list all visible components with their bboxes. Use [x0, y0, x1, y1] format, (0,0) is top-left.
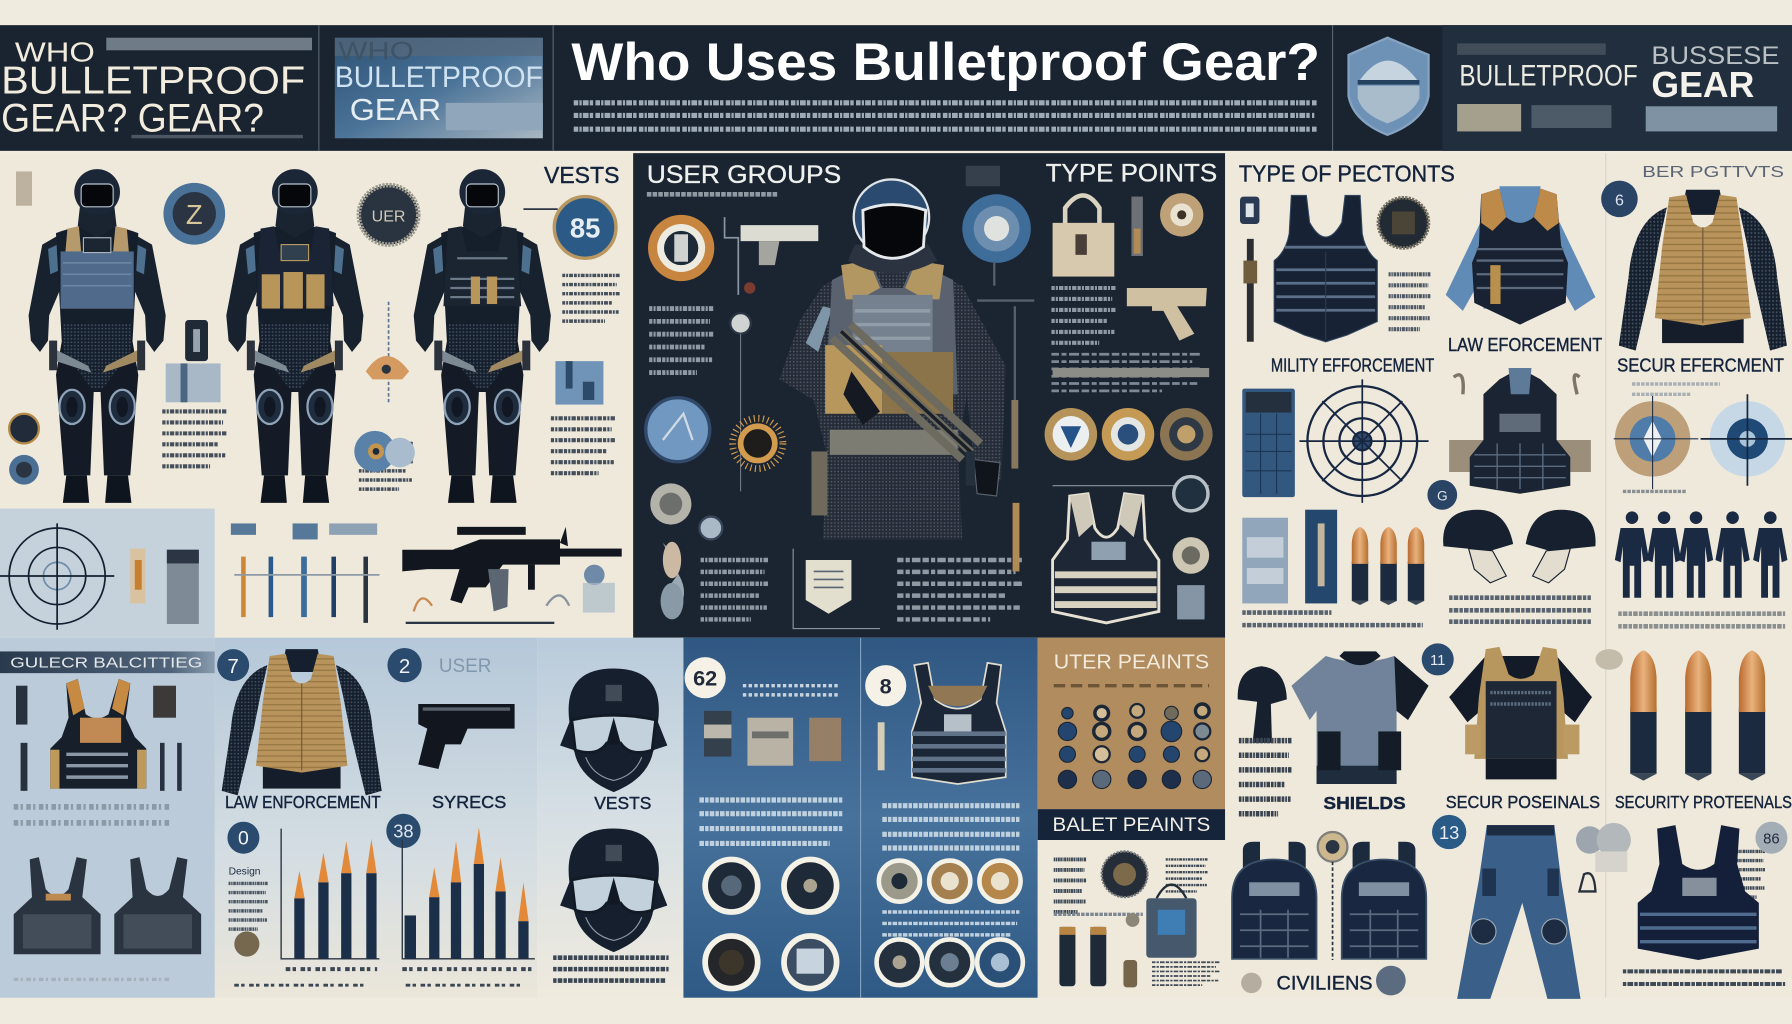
- heading: law eforcement: LAW EFORCEMENT: [1448, 334, 1602, 355]
- caption: [1623, 971, 1785, 984]
- icon: tote bag: [1146, 885, 1197, 958]
- icon: grey t-shirt: [1291, 651, 1429, 784]
- header left title block: GEAR? GEAR?: [1, 96, 264, 140]
- header second banner: WHO: [338, 37, 414, 65]
- badge 7: [217, 649, 249, 681]
- icon: pistol: [418, 704, 515, 769]
- label: law enforcement: LAW ENFORCEMENT: [225, 792, 381, 812]
- small icons: soldiers panel: [9, 171, 603, 485]
- badge 38: [386, 814, 421, 848]
- small discs by label: [1241, 966, 1406, 995]
- greeked captions: [1242, 598, 1785, 626]
- header second banner: [335, 37, 543, 138]
- badge: [1601, 181, 1638, 217]
- icon: target: [0, 523, 114, 630]
- photo strip: [704, 686, 841, 766]
- caption block: [553, 958, 669, 981]
- icon: grey vests: [14, 857, 201, 954]
- badge 62: [685, 657, 726, 698]
- greeked text: [14, 807, 171, 979]
- greeked text: [882, 806, 1019, 935]
- main title: Who Uses Bulletproof Gear?: [571, 33, 1320, 92]
- text blocks: user groups: [647, 194, 1202, 619]
- label: syrecs: SYRECS: [432, 792, 506, 812]
- heading strip: GULECR BALCITTIEG: [10, 655, 202, 671]
- icon: tan long sleeve vest: [1619, 190, 1787, 351]
- badge 86: 86: [1763, 831, 1780, 847]
- right icons: user groups: [962, 166, 1213, 571]
- header right banner: BULLETPROOF: [1459, 60, 1638, 93]
- notes: [1733, 851, 1765, 897]
- circular icons: [705, 859, 837, 989]
- badge 11: [1422, 643, 1454, 675]
- icon: two helmets: [1443, 510, 1596, 583]
- small rod: [878, 722, 885, 770]
- panel: types of protection: [1225, 153, 1792, 638]
- badge: G: [1437, 489, 1448, 504]
- badge 62: 62: [693, 666, 717, 691]
- text note: [229, 866, 268, 957]
- notes: [1054, 859, 1221, 985]
- header left title block: WHO: [15, 37, 95, 68]
- icon: rifle: [402, 527, 622, 611]
- badge 0: 0: [238, 828, 249, 850]
- header right banner: [1442, 25, 1792, 151]
- greeked notes: [1623, 384, 1720, 491]
- icon: cylinders: [1059, 913, 1139, 987]
- header left title block: BULLETPROOF: [1, 60, 305, 103]
- icon: pendant line: [1318, 832, 1347, 960]
- icon: document: [1242, 518, 1288, 603]
- panel: target strip: [0, 509, 215, 638]
- panel: blue panel 2: [861, 638, 1038, 998]
- text note: Design: [229, 866, 261, 877]
- panel: uter peaints tan: [1038, 638, 1225, 809]
- icon: jeans: [1457, 825, 1581, 999]
- heading strip: balet peaints: [1038, 809, 1225, 840]
- badge: 6: [1615, 193, 1624, 210]
- header right banner: GEAR: [1651, 64, 1754, 105]
- faded heading user: USER: [439, 655, 491, 677]
- small round badges: [1173, 477, 1209, 619]
- header band: [0, 25, 1792, 151]
- icon: blue badge 85: [523, 197, 616, 258]
- heading: uter peaints: UTER PEAINTS: [1054, 651, 1209, 674]
- text blocks: soldiers panel: [162, 275, 718, 489]
- bullet bar chart 1: [281, 829, 379, 959]
- icon: patterned ring badge: UER: [372, 209, 405, 226]
- label: secur poseinals: SECUR POSEINALS: [1446, 792, 1600, 812]
- icon: blue badge Z: Z: [186, 199, 203, 230]
- panel: law enforcement: [215, 638, 683, 998]
- heading strip: balet peaints: BALET PEAINTS: [1053, 814, 1210, 836]
- icon: patterned ring badge: [359, 185, 418, 245]
- greeked row: [1054, 684, 1209, 687]
- badge 11: 11: [1430, 653, 1445, 669]
- panel: clothing: [1225, 638, 1792, 999]
- badge 0: [227, 822, 259, 854]
- header second banner: GEAR: [350, 92, 441, 127]
- icon: tablet: [1242, 389, 1295, 497]
- badge plaque: [793, 549, 880, 629]
- icon: backpack right: [1342, 843, 1426, 959]
- icon: row of people: [1615, 511, 1787, 598]
- small items below rifle: [406, 565, 615, 624]
- badge 7: 7: [227, 655, 239, 678]
- icon: tan vest sweater: [222, 649, 382, 795]
- icon: police vest: [1449, 368, 1591, 494]
- label: civiliens: CIVILIENS: [1277, 973, 1373, 995]
- panel: user groups: [633, 153, 1225, 638]
- badge 13: [1432, 815, 1466, 849]
- badge 13: 13: [1439, 822, 1459, 843]
- badge 2: [387, 648, 422, 682]
- heading: ber pgttvts: BER PGTTVTS: [1642, 164, 1784, 181]
- icon: shield: [1349, 38, 1429, 135]
- icon: navy vest lower: [1638, 825, 1759, 960]
- panel: bottom left blue: [0, 638, 215, 998]
- heading strip: [0, 651, 215, 673]
- soldier 3: [414, 169, 551, 503]
- header second banner: BULLETPROOF: [335, 61, 543, 94]
- heading: type of pectonts: TYPE OF PECTONTS: [1239, 161, 1455, 187]
- icon: helmet upper: [560, 669, 667, 792]
- label: shields: SHIELDS: [1323, 793, 1406, 813]
- notes: [1239, 741, 1292, 814]
- chart captions: [234, 969, 531, 985]
- badge 2: 2: [399, 655, 410, 678]
- tools row: [231, 523, 379, 623]
- panel: blue panel 1: [683, 638, 861, 998]
- icon: bullets small: [1352, 527, 1424, 605]
- header paragraph: [574, 103, 1317, 129]
- icon: blue disc: [1701, 394, 1792, 486]
- badge 86: [1755, 822, 1787, 854]
- icon: card: [1305, 510, 1337, 603]
- icon: crosshair target: [1299, 379, 1429, 503]
- circular icons: [877, 861, 1023, 985]
- badge 8: [865, 665, 906, 706]
- label: vests: VESTS: [594, 793, 651, 813]
- icon: tan disc: [1614, 394, 1698, 489]
- icon: tee with tan vest: [1449, 647, 1592, 779]
- central soldier: [779, 179, 1006, 539]
- icon: backpack left: [1232, 843, 1317, 959]
- small tools: [16, 686, 182, 791]
- panel: cream notes: [1038, 840, 1225, 998]
- icon: outlined vest: [1053, 494, 1159, 623]
- heading: user groups: USER GROUPS: [647, 161, 841, 189]
- heading: vests: VESTS: [544, 162, 619, 188]
- soldier 1: [29, 169, 166, 503]
- icon: blue badge Z: [163, 183, 225, 245]
- soldier 2: [226, 169, 363, 503]
- small disc: [1595, 649, 1623, 670]
- bullet bar chart 2: [402, 827, 535, 959]
- icon: round badge: [1102, 851, 1147, 897]
- badge 8: 8: [880, 674, 892, 699]
- left icons: user groups: [646, 215, 818, 619]
- icon: vest with stripes: [1274, 195, 1377, 342]
- panel: soldiers: [0, 153, 718, 509]
- icon: vest with orange straps: [50, 679, 146, 789]
- icon: striped vest: [912, 663, 1006, 784]
- icon: grey discs: [1576, 823, 1631, 891]
- icon: blue badge 85: 85: [570, 213, 600, 244]
- badge 38: 38: [393, 821, 414, 842]
- greeked text: [699, 800, 843, 843]
- badge: [1427, 480, 1457, 510]
- icon: tool: [130, 549, 199, 624]
- heading: mility efforcement: MILITY EFFORCEMENT: [1271, 354, 1434, 375]
- heading: type points: TYPE POINTS: [1046, 160, 1217, 188]
- icon: small helmet: [1238, 666, 1287, 743]
- header left title block: [1, 37, 312, 140]
- header right banner: BUSSESE: [1651, 42, 1779, 70]
- icon: shirt with vest: [1446, 186, 1595, 325]
- panel: rifle strip: [215, 509, 633, 638]
- icon: helmet lower: [560, 829, 667, 952]
- icon grid: [1058, 704, 1211, 789]
- small items: [1240, 197, 1431, 342]
- icon: three large bullets: [1630, 650, 1765, 781]
